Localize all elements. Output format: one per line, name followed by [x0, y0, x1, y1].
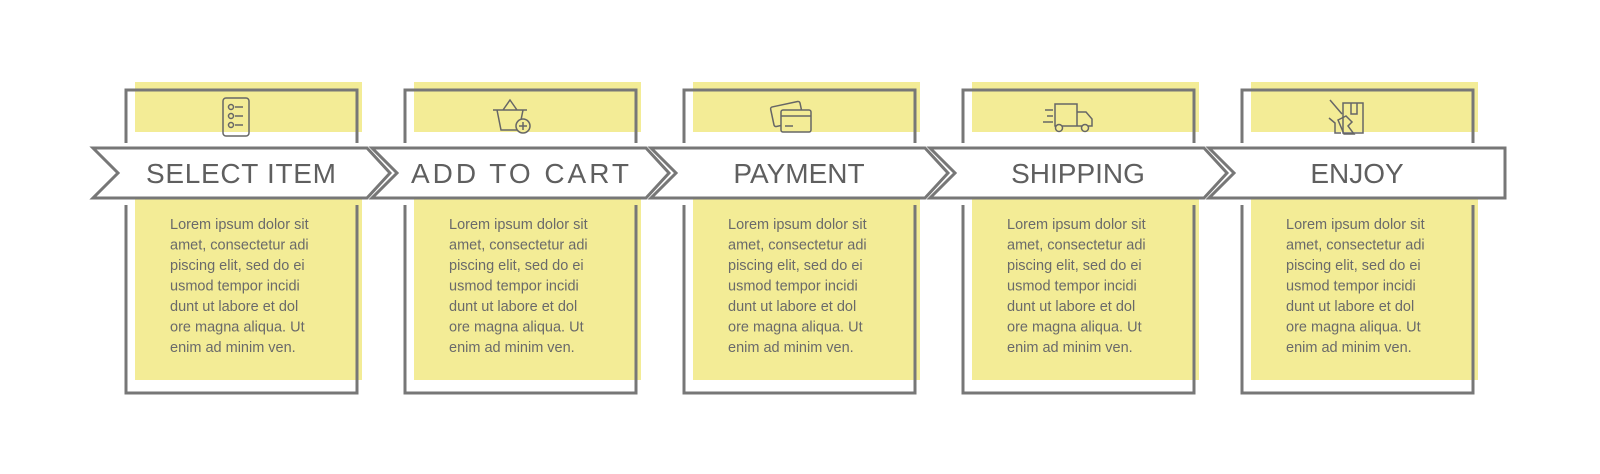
text block: enim ad minim ven. — [728, 340, 854, 356]
ribbon: shipping: SHIPPING — [1011, 158, 1145, 189]
text block: piscing elit, sed do ei — [1007, 258, 1142, 274]
text block: amet, consectetur adi — [1286, 238, 1425, 254]
text block: ore magna aliqua. Ut — [1286, 320, 1421, 336]
text block: Lorem ipsum dolor sit — [1007, 217, 1146, 233]
text block: dunt ut labore et dol — [1286, 299, 1414, 315]
panel: add to cart — [372, 82, 669, 393]
text block: piscing elit, sed do ei — [728, 258, 863, 274]
text block: Lorem ipsum dolor sit — [449, 217, 588, 233]
text block: dunt ut labore et dol — [449, 299, 577, 315]
text block: usmod tempor incidi — [449, 278, 579, 294]
ribbon: shipping — [930, 148, 1227, 198]
text block: usmod tempor incidi — [1007, 278, 1137, 294]
ribbon: select item — [93, 148, 390, 198]
text block: enim ad minim ven. — [1007, 340, 1133, 356]
text block: ore magna aliqua. Ut — [728, 320, 863, 336]
text block: amet, consectetur adi — [1007, 238, 1146, 254]
panel: shipping — [930, 82, 1227, 393]
text block: piscing elit, sed do ei — [170, 258, 305, 274]
text block: dunt ut labore et dol — [728, 299, 856, 315]
ribbon: enjoy: ENJOY — [1310, 158, 1404, 189]
text block: dunt ut labore et dol — [170, 299, 298, 315]
text block: piscing elit, sed do ei — [1286, 258, 1421, 274]
panel: enjoy — [1209, 82, 1505, 393]
icon: truck — [1043, 104, 1092, 132]
text block: ore magna aliqua. Ut — [1007, 320, 1142, 336]
text block: ore magna aliqua. Ut — [170, 320, 305, 336]
icon: checklist — [223, 98, 249, 136]
text block: enim ad minim ven. — [1286, 340, 1412, 356]
text block: enim ad minim ven. — [449, 340, 575, 356]
ribbon: add to cart — [372, 148, 669, 198]
text block: usmod tempor incidi — [728, 278, 858, 294]
text block: usmod tempor incidi — [170, 278, 300, 294]
text block: piscing elit, sed do ei — [449, 258, 584, 274]
text block: Lorem ipsum dolor sit — [1286, 217, 1425, 233]
text block: Lorem ipsum dolor sit — [728, 217, 867, 233]
icon: hand with box — [1329, 100, 1363, 134]
panel: select item — [93, 82, 390, 393]
ribbon: payment — [651, 148, 948, 198]
text block: amet, consectetur adi — [449, 238, 588, 254]
ribbon: payment: PAYMENT — [733, 158, 865, 189]
text block: usmod tempor incidi — [1286, 278, 1416, 294]
icon: basket — [493, 100, 530, 133]
ribbon: add to cart: ADD TO CART — [411, 158, 629, 189]
text block: ore magna aliqua. Ut — [449, 320, 584, 336]
text block: amet, consectetur adi — [170, 238, 309, 254]
panel: payment — [651, 82, 948, 393]
text block: enim ad minim ven. — [170, 340, 296, 356]
text block: amet, consectetur adi — [728, 238, 867, 254]
icon: cards — [770, 101, 811, 132]
ribbon: enjoy — [1209, 148, 1505, 198]
text block: Lorem ipsum dolor sit — [170, 217, 309, 233]
ribbon: select item: SELECT ITEM — [146, 158, 336, 189]
text block: dunt ut labore et dol — [1007, 299, 1135, 315]
